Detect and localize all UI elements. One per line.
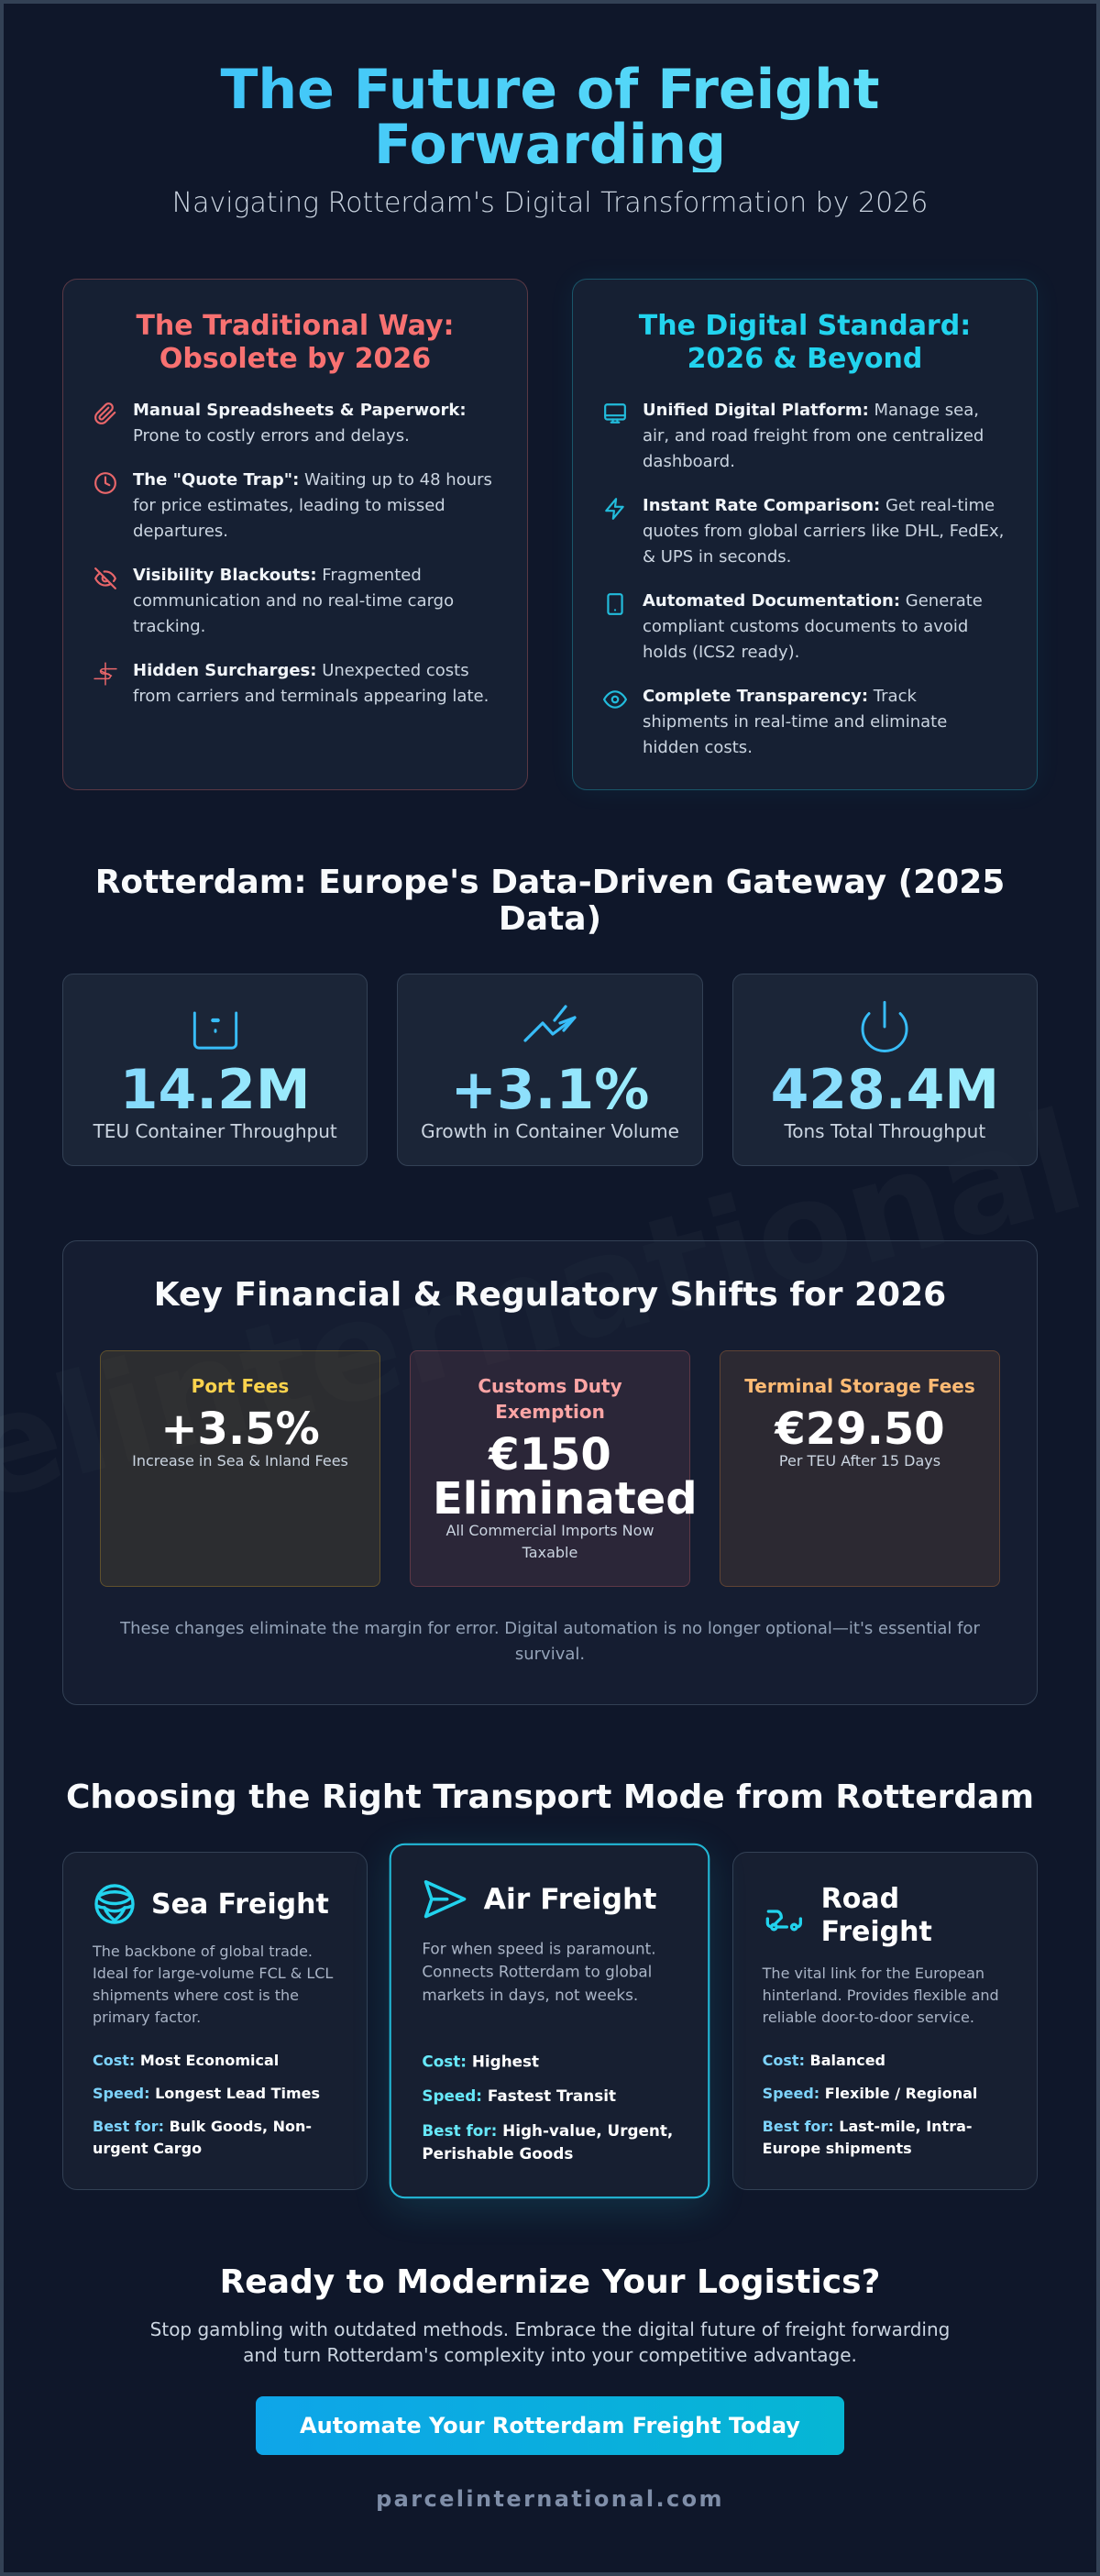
fee: port: Port Fees (192, 1375, 289, 1397)
fee: terminal (720, 1350, 1000, 1587)
stat: growth (397, 974, 703, 1166)
item: hidden surcharges: Hidden Surcharges: Unexpected costs from carriers and terminals appearing late. (133, 661, 489, 706)
stat: growth: +3.1% (451, 1058, 649, 1122)
card: sea freight: Speed: Longest Lead Times (93, 2085, 320, 2102)
heading: transport: Choosing the Right Transport Mode from Rotterdam (66, 1778, 1034, 1816)
note: These changes eliminate the margin for error. Digital automation is no longer optional—it's essential for survival. (120, 1619, 980, 1664)
stat: total tons (732, 974, 1038, 1166)
card: road freight: Cost: Balanced (763, 2052, 886, 2069)
fee: terminal: €29.50 (775, 1404, 945, 1455)
card: air freight: For when speed is paramount. Connects Rotterdam to global markets in days, not weeks. (423, 1940, 656, 2004)
stat: total tons: Tons Total Throughput (784, 1120, 985, 1142)
CTA button: Automate Your Rotterdam Freight Today (300, 2413, 800, 2438)
card: air freight: Air Freight (484, 1883, 657, 1917)
item: complete transparency: Complete Transparency: Track shipments in real-time and eliminate hidden costs. (643, 687, 947, 757)
stat: TEU throughput (62, 974, 368, 1166)
CTA text: Stop gambling with outdated methods. Embrace the digital future of freight forwarding and turn Rotterdam's complexity into your competitive advantage. (150, 2318, 950, 2366)
fee: customs (410, 1350, 690, 1587)
heading: key shifts: Key Financial & Regulatory Shifts for 2026 (154, 1276, 946, 1314)
item: automated documentation: Automated Documentation: Generate compliant customs documents to avoid holds (ICS2 ready). (643, 591, 983, 662)
CTA button (256, 2396, 844, 2455)
fee: customs: €150 Eliminated (433, 1429, 698, 1525)
heading: rotterdam: Rotterdam: Europe's Data-Driven Gateway (2025 Data) (95, 864, 1005, 938)
card: sea freight: Best for: Bulk Goods, Non-urgent Cargo (93, 2118, 312, 2157)
card: air freight (390, 1844, 710, 2198)
fee: terminal: Terminal Storage Fees (744, 1375, 975, 1397)
footer site: parcelinternational.com (376, 2486, 724, 2512)
panel: digital standard (572, 279, 1038, 790)
item: instant rate comparison: Instant Rate Comparison: Get real-time quotes from global carriers like DHL, FedEx, & UPS in seconds. (643, 496, 1004, 567)
title: Forwarding (374, 113, 726, 177)
stat: total tons: 428.4M (771, 1058, 999, 1122)
fee: customs: All Commercial Imports Now Taxable (446, 1522, 654, 1561)
panel: traditional way (62, 279, 528, 790)
card: air freight: Cost: Highest (423, 2053, 539, 2071)
item: unified platform: Unified Digital Platform: Manage sea, air, and road freight from one centralized dashboard. (643, 401, 984, 471)
fee: customs: Customs Duty Exemption (478, 1375, 622, 1423)
stat: TEU throughput: 14.2M (120, 1058, 311, 1122)
panel: traditional way: The Traditional Way: Obsolete by 2026 (136, 310, 455, 375)
subtitle: Navigating Rotterdam's Digital Transformation by 2026 (172, 187, 928, 219)
panel: financial shifts (62, 1240, 1038, 1705)
card: sea freight (62, 1852, 368, 2190)
heading: CTA: Ready to Modernize Your Logistics? (220, 2263, 880, 2301)
card: road freight: Road Freight (821, 1883, 932, 1948)
card: air freight: Best for: High-value, Urgent, Perishable Goods (423, 2121, 674, 2163)
card: road freight: Speed: Flexible / Regional (763, 2085, 977, 2102)
stat: TEU throughput: TEU Container Throughput (94, 1120, 337, 1142)
item: visibility blackouts: Visibility Blackouts: Fragmented communication and no real-time cargo tracking. (133, 566, 454, 636)
stat: growth: Growth in Container Volume (421, 1120, 679, 1142)
panel: digital standard: The Digital Standard: (639, 310, 971, 342)
fee: port: +3.5% (160, 1404, 320, 1455)
card: road freight: Best for: Last-mile, Intra-Europe shipments (763, 2118, 973, 2157)
card: road freight (732, 1852, 1038, 2190)
card: road freight: The vital link for the European hinterland. Provides flexible and reliable door-to-door service. (763, 1965, 999, 2026)
item: manual spreadsheets: Manual Spreadsheets & Paperwork: Prone to costly errors and delays. (133, 401, 467, 446)
card: sea freight: Sea Freight (151, 1888, 329, 1921)
title (62, 62, 1038, 172)
card: sea freight: Cost: Most Economical (93, 2052, 279, 2069)
item: quote trap: The "Quote Trap": Waiting up to 48 hours for price estimates, leading to missed departures. (133, 470, 492, 541)
title: The Future of Freight (220, 58, 880, 122)
card: sea freight: The backbone of global trade. Ideal for large-volume FCL & LCL shipments where cost is the primary factor. (93, 1943, 333, 2026)
fee: port (100, 1350, 380, 1587)
card: air freight: Speed: Fastest Transit (423, 2086, 616, 2105)
panel: digital standard: 2026 & Beyond (688, 343, 922, 375)
fee: port: Increase in Sea & Inland Fees (132, 1452, 348, 1470)
fee: terminal: Per TEU After 15 Days (779, 1452, 940, 1470)
